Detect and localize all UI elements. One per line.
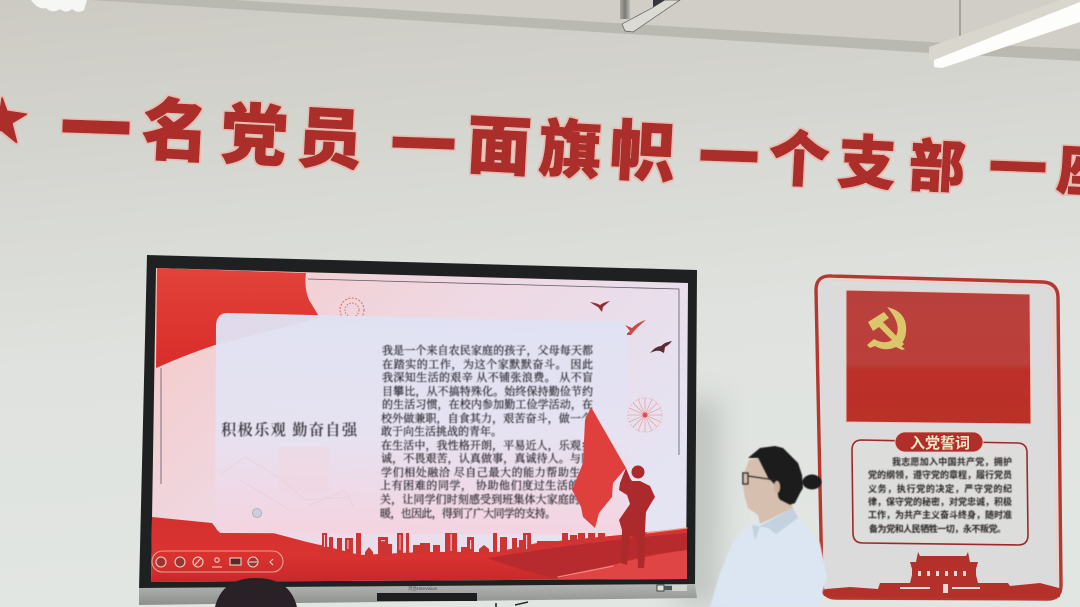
- oath text: 义务，执行党的决定，严守党的纪: [868, 483, 1012, 494]
- hair bun: [802, 474, 822, 490]
- slogan characters: [63, 93, 1080, 204]
- wall shadow beside screen: [675, 400, 720, 607]
- red flag: [572, 407, 626, 528]
- slide body text: 目攀比，从不搞特殊化。始终保持勤俭节约: [382, 384, 593, 398]
- light wave band: [556, 550, 687, 579]
- slide title: 积极乐观 勤奋自强: [221, 421, 358, 439]
- oath text: 备为党和人民牺牲一切，永不叛党。: [869, 523, 1006, 534]
- display screen: [139, 255, 697, 605]
- oath box: [852, 440, 1028, 545]
- toolbar: [152, 551, 283, 572]
- slide body text: 学们相处融洽 尽自己最大的能力帮助生活: [381, 465, 592, 479]
- slide background: [151, 268, 688, 582]
- brand label: 鸿合HiteVision: [408, 585, 438, 592]
- slogan characters: 名: [140, 93, 211, 171]
- oath text: 工作，为共产主义奋斗终身，随时准: [868, 509, 1012, 520]
- slide body text: 上有困难的同学， 协助他们度过生活的难: [380, 478, 591, 492]
- slide body text: 校外做兼职，自食其力，艰苦奋斗，做一个: [381, 411, 592, 425]
- skyline: [322, 533, 605, 556]
- slide: [151, 268, 688, 582]
- poster: party oath: [816, 276, 1061, 599]
- slide body text: 暖，也因此，得到了广大同学的支持。: [380, 506, 556, 520]
- control strip: [377, 593, 477, 601]
- projector pole: [620, 0, 680, 32]
- bottom silver bar: [139, 584, 697, 605]
- glasses: [743, 473, 775, 484]
- audience head: [215, 578, 297, 607]
- oath text: 律，保守党的秘密，对党忠诚，积极: [868, 496, 1012, 507]
- birds: [590, 301, 672, 353]
- oath heading: 入党誓词: [910, 434, 970, 452]
- frame line: [161, 279, 679, 484]
- ceiling lamp left: [31, 0, 87, 12]
- ceiling light tube: [929, 0, 1080, 68]
- inner pink line: [833, 280, 1057, 583]
- slide body text: 敢于向生活挑战的青年。: [381, 424, 502, 438]
- tiananmen silhouette: [822, 552, 1060, 598]
- presenter: [710, 446, 827, 607]
- slogan characters: 支: [836, 130, 898, 198]
- bar marks under screen: [496, 602, 528, 607]
- party flag: [846, 290, 1031, 424]
- soldier silhouette: [619, 466, 655, 568]
- firework right: [628, 398, 662, 432]
- ceiling beam: [90, 0, 1080, 61]
- ear: [774, 481, 780, 493]
- slide body text: 我是一个来自农民家庭的孩子，父母每天都: [382, 343, 593, 357]
- status icons: [657, 585, 687, 591]
- poster frame: [816, 276, 1061, 599]
- screen bezel: [139, 255, 697, 590]
- slogan on wall: [0, 93, 1080, 204]
- slogan characters: 党: [219, 97, 289, 174]
- firework top: [340, 298, 364, 322]
- slogan characters: 旗: [537, 115, 603, 187]
- small logo: [252, 508, 262, 518]
- watermark drawing: [220, 447, 355, 510]
- slogan characters: 部: [907, 134, 967, 200]
- dark wave band: [487, 533, 687, 578]
- oath text: 我志愿加入中国共产党，拥护: [892, 456, 1012, 467]
- slogan characters: 员: [295, 101, 364, 177]
- icon: hammer and sickle: [867, 307, 906, 350]
- oath heading: [895, 432, 983, 452]
- slogan characters: 面: [465, 109, 533, 184]
- shirt: [710, 507, 827, 607]
- text card: [215, 313, 627, 535]
- slide body text: 诚，不畏艰苦，认真做事，真诚待人。与同: [381, 451, 592, 465]
- slide body text: 我深知生活的艰辛 从不铺张浪费。 从不盲: [382, 370, 593, 384]
- slide body text: [380, 343, 593, 520]
- oath text: [868, 456, 1012, 534]
- red corner shape: [156, 268, 320, 368]
- icon: red star: [0, 97, 27, 143]
- shirt folds: [752, 508, 798, 541]
- slide body text: 的生活习惯，在校内参加勤工俭学活动，在: [382, 397, 593, 411]
- slogan characters: 个: [767, 125, 831, 195]
- slide body text: 关，让同学们时刻感受到班集体大家庭的温: [380, 492, 591, 506]
- hair: [748, 446, 803, 505]
- light streaks: [250, 528, 687, 577]
- slide body text: 在生活中，我性格开朗，平易近人，乐观乡: [381, 438, 592, 452]
- bottom red wave: [151, 517, 687, 582]
- neck and face: [743, 458, 793, 524]
- slide body text: 在踏实的工作，为这个家默默奋斗。 因此: [382, 357, 593, 371]
- oath text: 党的纲领，遵守党的章程，履行党员: [868, 469, 1012, 480]
- slogan characters: 帜: [608, 114, 677, 190]
